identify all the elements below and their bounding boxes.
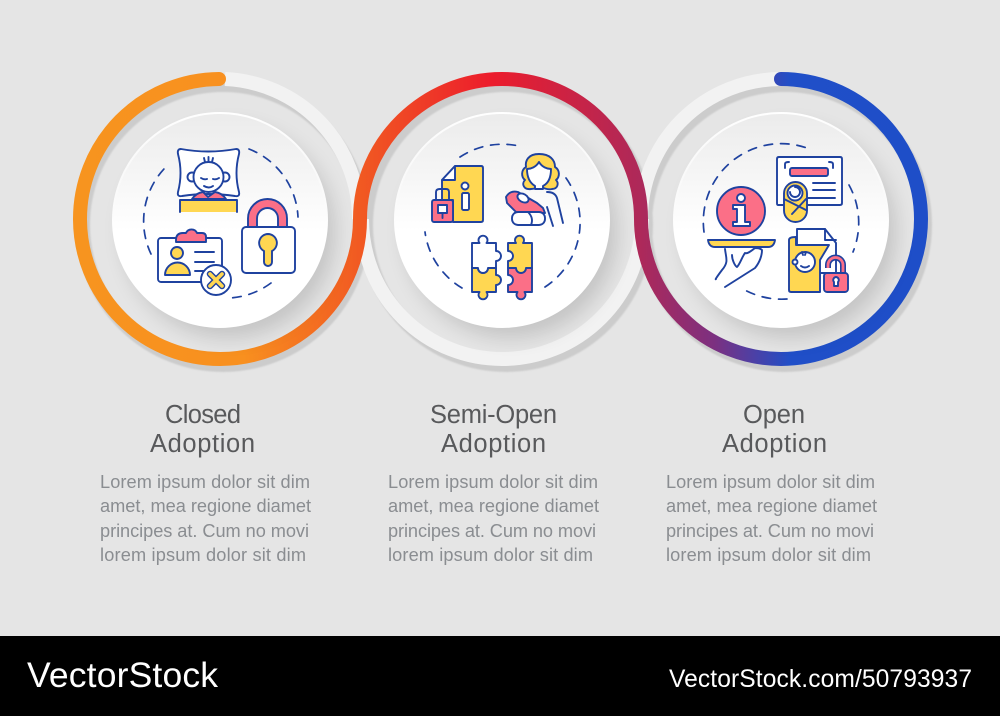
text block: open adoption: lorem ipsum dolor sit dim <box>666 545 871 565</box>
text block: semi-open adoption: amet, mea regione diamet <box>388 496 599 516</box>
panel: closed adoption disc and icons <box>112 112 328 328</box>
dashed circle <box>144 149 298 298</box>
text block: semi-open adoption: lorem ipsum dolor sit dim <box>388 545 593 565</box>
ring shadows <box>83 85 925 365</box>
panel: open adoption disc and icons <box>673 112 889 328</box>
dashed circle <box>703 144 859 299</box>
text block: open adoption <box>666 401 877 565</box>
icon: woman holding baby <box>506 154 563 226</box>
text block: semi-open adoption: Lorem ipsum dolor sit dim <box>388 472 598 492</box>
icon: info on tray held by hand <box>708 187 775 287</box>
icon: puzzle pieces <box>472 236 532 299</box>
text block: open adoption: Open <box>743 401 805 429</box>
text block: closed adoption: Adoption <box>150 430 255 458</box>
flowing gradient line across three rings <box>80 79 921 359</box>
icon: document with lock <box>432 166 483 222</box>
disc shadows <box>123 126 896 338</box>
text block: open adoption: Lorem ipsum dolor sit dim <box>666 472 875 492</box>
icon: padlock <box>242 199 295 273</box>
icon: sleeping baby <box>178 149 239 212</box>
text block: open adoption: Adoption <box>722 430 827 458</box>
icon: certificate with swaddled baby <box>777 157 842 222</box>
text block: semi-open adoption <box>388 401 599 565</box>
text block: closed adoption <box>100 401 311 565</box>
footer image id: VectorStock.com/50793937 <box>669 666 972 693</box>
footer bar <box>0 636 1000 716</box>
dashed circle <box>425 144 580 288</box>
text block: open adoption: amet, mea regione diamet <box>666 496 877 516</box>
text block: closed adoption: Closed <box>165 401 241 429</box>
footer logo text: VectorStock <box>27 655 218 695</box>
icon: baby file with open lock <box>789 229 848 292</box>
text block: closed adoption: lorem ipsum dolor sit dim <box>100 545 306 565</box>
text block: closed adoption: Lorem ipsum dolor sit dim <box>100 472 310 492</box>
icon: id card with cross <box>158 229 231 295</box>
text block: semi-open adoption: Adoption <box>441 430 546 458</box>
panel: semi-open adoption disc and icons <box>394 112 610 328</box>
text block: closed adoption: amet, mea regione diamet <box>100 496 311 516</box>
text block: semi-open adoption: principes at. Cum no movi <box>388 521 596 541</box>
pale ring tracks <box>225 79 781 359</box>
text block: semi-open adoption: Semi-Open <box>430 401 557 429</box>
text block: closed adoption: principes at. Cum no movi <box>100 521 309 541</box>
text block: open adoption: principes at. Cum no movi <box>666 521 874 541</box>
